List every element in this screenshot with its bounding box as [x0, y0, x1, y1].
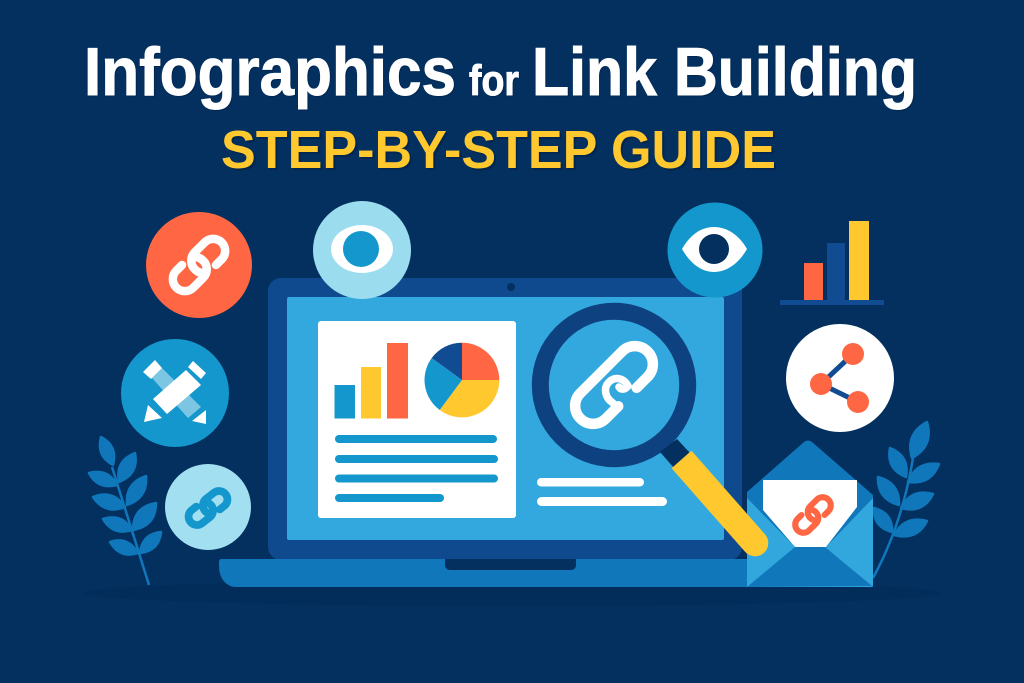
title: for [469, 57, 519, 105]
icon: share circle [786, 324, 894, 432]
envelope [747, 440, 873, 587]
magnifying glass [540, 311, 768, 556]
envelope back and flap [747, 440, 873, 587]
title: Link Building [532, 34, 917, 110]
icon: chain link light circle [165, 464, 251, 550]
yellow handle [673, 452, 768, 556]
screen text lines [537, 478, 667, 506]
icon: eye blue circle [668, 202, 762, 298]
handle neck [660, 439, 690, 468]
envelope bottom fold [747, 547, 872, 587]
right plant [873, 422, 939, 578]
laptop [219, 278, 760, 587]
bar chart [334, 343, 408, 418]
lens ring [540, 311, 688, 459]
link in lens [568, 339, 660, 431]
left plant [89, 437, 161, 585]
envelope front [747, 498, 873, 587]
laptop base [219, 559, 760, 587]
link on paper [792, 494, 834, 536]
panel: report document [318, 321, 516, 518]
subtitle: STEP-BY-STEP GUIDE [221, 120, 776, 180]
text lines [335, 435, 498, 502]
title: Infographics [84, 34, 456, 110]
laptop notch [445, 559, 576, 570]
small bar chart [780, 221, 884, 305]
icon: eye light circle [313, 201, 411, 299]
title [84, 34, 917, 110]
pie chart [425, 343, 499, 417]
laptop body [268, 278, 742, 560]
icon: chain link orange circle [146, 212, 252, 318]
laptop camera [507, 283, 515, 291]
icon: crossed pencils [121, 339, 229, 447]
paper [763, 480, 857, 547]
laptop screen [287, 297, 724, 540]
